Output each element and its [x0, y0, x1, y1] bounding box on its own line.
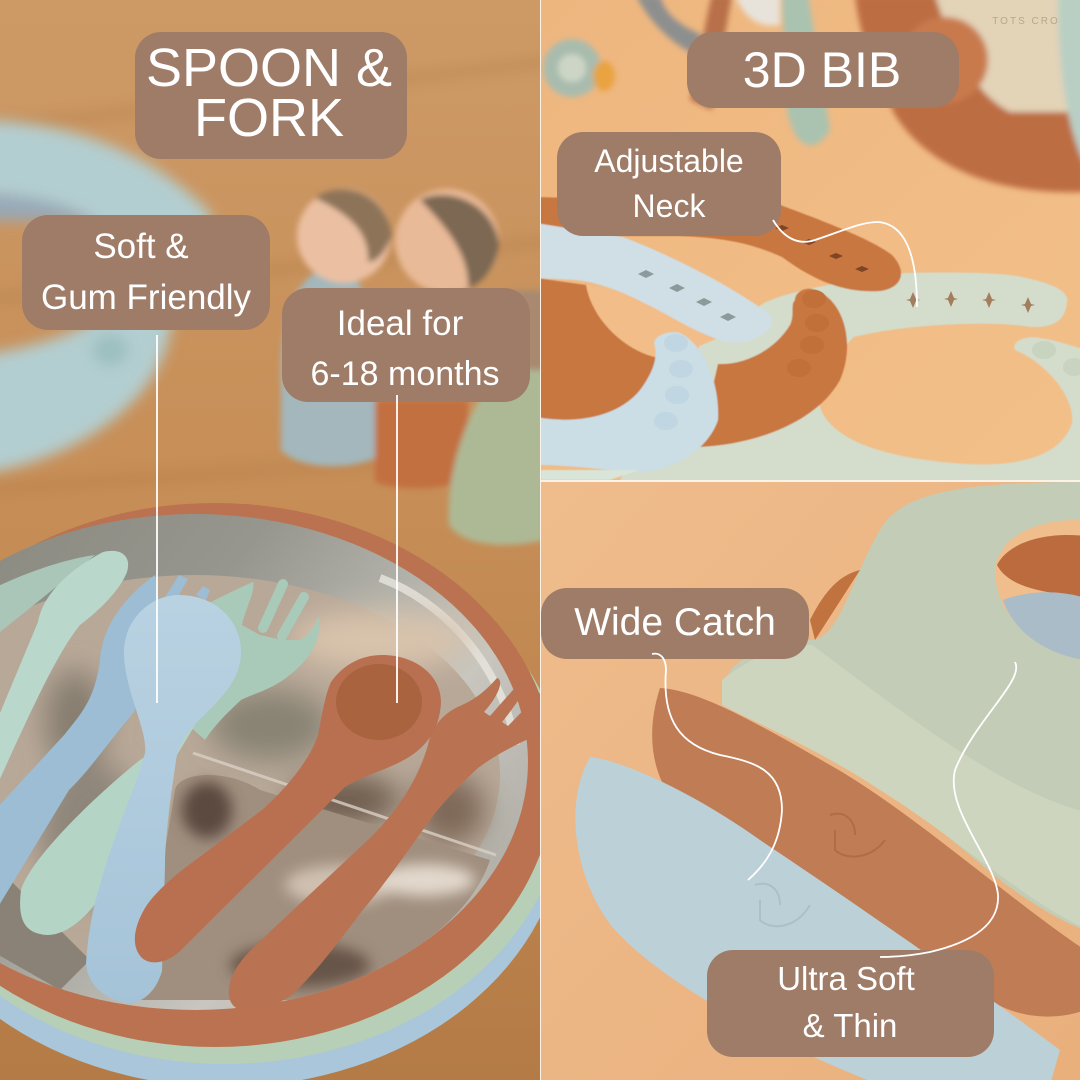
bib studs [654, 290, 1080, 430]
rust spoon [135, 655, 441, 962]
blurred bib top left [0, 120, 212, 474]
label: soft and gum friendly [22, 215, 270, 330]
title: spoon and fork: SPOON & [146, 38, 392, 98]
panel: spoon and fork photo [0, 0, 565, 1080]
blue bib [536, 332, 718, 472]
green fork [20, 582, 319, 935]
stacked plates [0, 503, 565, 1080]
rust left bib [541, 278, 656, 420]
sage bib [725, 482, 1080, 930]
rust right bib [699, 289, 847, 447]
utensils [0, 551, 545, 1010]
label: soft and gum friendly: Gum Friendly [41, 278, 252, 317]
connector lines [157, 220, 1016, 957]
panel: 3D bib bottom photo [541, 482, 1080, 1080]
left bib neck hole [586, 285, 725, 357]
mint spoon [0, 551, 128, 790]
label: ultra soft and thin: & Thin [803, 1007, 897, 1044]
light blue spoon [86, 595, 241, 1003]
label: ideal for 6-18 months [282, 288, 530, 402]
label: adjustable neck [557, 132, 781, 236]
line: adjustable neck [773, 220, 917, 307]
line: ideal for months [396, 395, 398, 703]
label: wide catch: Wide Catch [574, 601, 776, 644]
logo marks [755, 814, 885, 926]
label: wide catch [541, 588, 809, 659]
label: ideal for 6-18 months: Ideal for [337, 304, 464, 343]
label: adjustable neck: Adjustable [594, 143, 744, 179]
rust strap [536, 197, 901, 291]
pacifier [543, 39, 615, 97]
label: soft and gum friendly: Soft & [93, 227, 189, 266]
blue catch pocket [575, 757, 1060, 1080]
bib neck opening [995, 520, 1080, 620]
bib holes [638, 225, 1035, 321]
title: 3D bib [687, 32, 959, 108]
line: ultra soft [880, 662, 1016, 957]
label: ideal for 6-18 months: 6-18 months [310, 355, 500, 393]
title: spoon and fork [135, 32, 407, 159]
steel plate interior [0, 510, 540, 1020]
plate brand text: TOTS CRO [992, 16, 1060, 27]
blurred plate and pacifier background [543, 0, 1080, 192]
label: adjustable neck: Neck [633, 188, 706, 224]
line: soft and gum friendly [156, 335, 158, 703]
line: wide catch [652, 654, 782, 880]
blurred peg dolls [281, 189, 545, 545]
rust fork [229, 674, 545, 1010]
rust catch pocket [652, 688, 1080, 1017]
sage bib [620, 272, 1080, 485]
blue fork [0, 575, 210, 912]
title: spoon and fork: FORK [194, 88, 344, 148]
panel: 3D bib top photo [536, 0, 1080, 485]
label: ultra soft and thin [707, 950, 994, 1057]
bibs [536, 197, 1080, 485]
title: 3D bib: 3D BIB [743, 42, 901, 98]
label: ultra soft and thin: Ultra Soft [777, 960, 915, 997]
blue strap [536, 223, 772, 343]
